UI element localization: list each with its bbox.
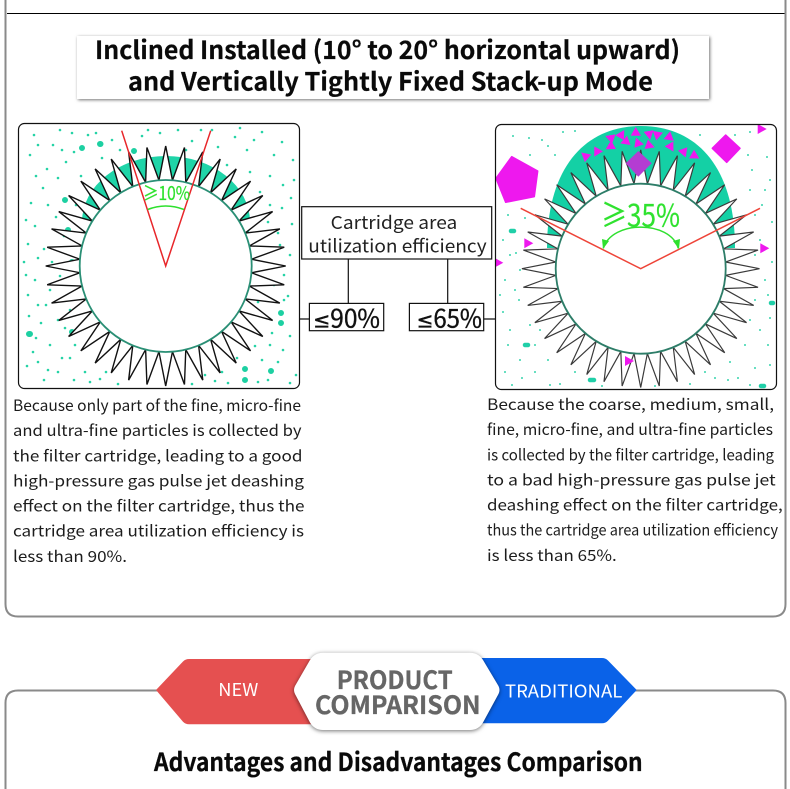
panel border — [18, 124, 300, 388]
box: 65 percent: ≤65% — [416, 299, 482, 335]
efficiency flow diagram — [300, 207, 496, 335]
green arc — [148, 206, 184, 210]
right description text: is collected by the filter cartridge, leading — [487, 444, 774, 466]
section heading: Advantages and Disadvantages Comparison — [153, 743, 643, 779]
right description text: to a bad high-pressure gas pulse jet — [487, 468, 776, 490]
tab: traditional: TRADITIONAL — [505, 678, 623, 704]
pleated cartridge teeth right — [503, 131, 778, 406]
purple dust diamond — [626, 151, 652, 177]
tab: new: NEW — [218, 676, 258, 702]
upper panel outline — [6, 0, 786, 616]
title: and Vertically Tightly Fixed Stack-up Mode — [128, 62, 653, 98]
tab: traditional — [450, 658, 637, 723]
center badge: product comparison: PRODUCT — [337, 661, 453, 697]
title: Inclined Installed (10° to 20° horizontal upward) — [95, 31, 680, 67]
right description text — [487, 393, 783, 566]
red angle lines right — [521, 208, 760, 269]
left description text: effect on the filter cartridge, thus the — [13, 494, 304, 516]
center badge: product comparison: COMPARISON — [315, 686, 481, 722]
tab: new — [156, 659, 340, 724]
right description text: is less than 65%. — [487, 544, 617, 566]
box: cartridge area utilization efficiency — [302, 207, 492, 259]
green arc with arrows — [602, 227, 680, 249]
pleated cartridge teeth — [27, 127, 304, 405]
small dust triangles — [494, 124, 769, 366]
large dust diamond — [712, 135, 740, 162]
left description text: cartridge area utilization efficiency is — [13, 520, 304, 542]
dust blobs — [29, 144, 281, 380]
panel: inclined cartridge diagram — [18, 124, 304, 405]
right description text: Because the coarse, medium, small, — [487, 393, 774, 415]
green label 35 percent: ≥35% — [601, 190, 680, 236]
left description text: high-pressure gas pulse jet deashing — [13, 470, 304, 492]
right description text: deashing effect on the filter cartridge, — [487, 494, 783, 516]
top rule — [7, 13, 785, 14]
center badge: product comparison — [294, 653, 500, 730]
right description text: fine, micro-fine, and ultra-fine particles — [487, 418, 773, 440]
lower panel outline — [6, 690, 786, 789]
dust dome on filter cartridge — [547, 126, 735, 248]
green label 10 percent: ≥10% — [143, 179, 190, 206]
left description text — [13, 394, 304, 567]
panel: horizontal cartridge diagram — [494, 124, 778, 406]
red angle lines — [122, 131, 211, 266]
left description text: the filter cartridge, leading to a good — [13, 444, 302, 466]
large dust pentagon — [496, 157, 538, 202]
left description text: less than 90%. — [13, 545, 127, 567]
box: cartridge area utilization efficiency: utilization efficiency — [308, 232, 487, 258]
dust blobs right — [511, 231, 773, 386]
panel border right — [496, 124, 776, 390]
left description text: and ultra-fine particles is collected by — [13, 419, 302, 441]
dust particles scattered — [24, 128, 296, 384]
box: cartridge area utilization efficiency: Cartridge area — [331, 209, 457, 235]
box: 90 percent: ≤90% — [313, 299, 380, 335]
dust particles scattered right — [500, 131, 772, 386]
cartridge core circle — [80, 180, 252, 352]
right description text: thus the cartridge area utilization efficiency — [487, 518, 778, 540]
title — [77, 31, 709, 99]
left description text: Because only part of the fine, micro-fine — [13, 394, 301, 416]
cartridge core circle right — [556, 184, 726, 354]
comparison banner — [156, 653, 637, 730]
dust layer on filter cartridge — [82, 156, 250, 288]
